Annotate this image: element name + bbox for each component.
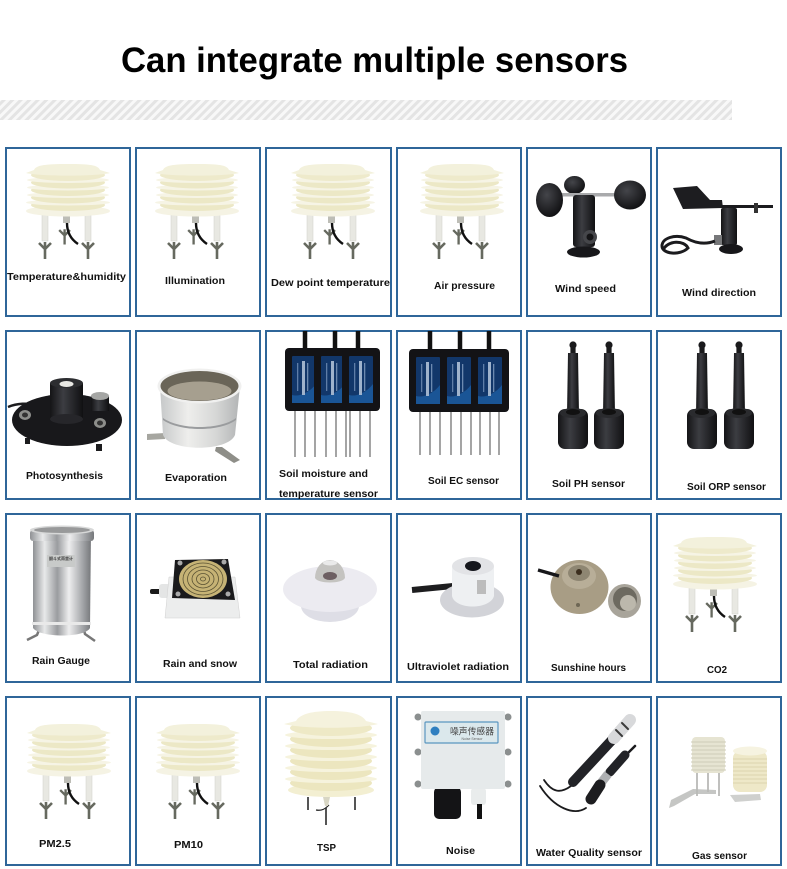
icon: noise sensor box: 噪声传感器 [450, 726, 494, 736]
label: Photosynthesis [26, 470, 103, 482]
label: Dew point temperature [271, 277, 390, 289]
panel: dew point temperature [266, 148, 391, 316]
icon: three soil probes [409, 331, 509, 455]
title: Can integrate multiple sensors [121, 41, 628, 80]
panel: PM2.5 [6, 697, 130, 865]
icon: radiation shield [673, 537, 757, 632]
label: Gas sensor [692, 850, 747, 862]
icon: evaporation bucket [147, 368, 242, 463]
panel: temperature and humidity [6, 148, 130, 316]
icon: radiation shield [27, 724, 111, 819]
icon: radiation shield [291, 164, 375, 259]
icon: photosynthesis sensor [8, 378, 122, 451]
panel: PM10 [136, 697, 260, 865]
panel: illumination [136, 148, 260, 316]
icon: rain and snow sensor [150, 559, 240, 618]
icon: gas sensor shields [669, 737, 767, 808]
label: Water Quality sensor [536, 847, 642, 859]
panel: rain gauge [6, 514, 130, 682]
panel: soil EC [397, 331, 521, 499]
label [279, 468, 378, 500]
label: Soil moisture and [279, 468, 368, 480]
icon: radiation shield [155, 164, 239, 259]
icon: sunshine sensor [538, 560, 641, 618]
panel: wind direction [657, 148, 781, 316]
icon: noise sensor box [414, 711, 512, 819]
icon: cup anemometer [536, 176, 646, 258]
icon: wind vane [662, 186, 773, 254]
panel: water quality [527, 697, 651, 865]
label: Rain and snow [163, 658, 238, 670]
panel: gas sensor [657, 697, 781, 865]
icon: rain gauge cylinder [27, 526, 95, 641]
label: Illumination [165, 275, 225, 287]
icon: UV sensor [412, 557, 504, 618]
icon: radiation shield [420, 164, 504, 259]
label: Noise [446, 845, 475, 857]
label: CO2 [707, 664, 727, 676]
icon: pyranometer dome [283, 560, 377, 622]
label: Rain Gauge [32, 655, 90, 667]
panel: noise [397, 697, 521, 865]
label: Air pressure [434, 280, 495, 292]
panel: ultraviolet radiation [397, 514, 521, 682]
panel: total radiation [266, 514, 391, 682]
panel: air pressure [397, 148, 521, 316]
panel: photosynthesis [6, 331, 130, 499]
label: PM10 [174, 839, 203, 851]
panel: rain and snow [136, 514, 260, 682]
icon: ORP probes [687, 341, 754, 449]
icon: PH probes [558, 341, 624, 449]
label: PM2.5 [39, 838, 71, 850]
panel: soil ORP [657, 331, 781, 499]
icon: radiation shield [156, 724, 240, 819]
label: Total radiation [293, 659, 368, 671]
icon: three soil probes [285, 331, 380, 457]
label: Soil PH sensor [552, 478, 625, 490]
hatched banner strip [0, 100, 732, 120]
label: Wind direction [682, 287, 756, 299]
panel: sunshine hours [527, 514, 651, 682]
icon: water quality probes [540, 720, 635, 811]
icon: large radiation shield [284, 711, 378, 825]
label: temperature sensor [279, 488, 378, 500]
label: Wind speed [555, 283, 616, 295]
icon: rain gauge cylinder: 翻斗式雨量计 [49, 555, 73, 561]
label: Temperature&humidity [7, 271, 126, 283]
panel: CO2 [657, 514, 781, 682]
panel: evaporation [136, 331, 260, 499]
label: Soil EC sensor [428, 475, 499, 487]
icon: radiation shield [26, 164, 110, 259]
label: Evaporation [165, 472, 227, 484]
panel: soil moisture and temperature [266, 331, 391, 500]
panel: wind speed [527, 148, 651, 316]
icon: noise sensor box: Noise Sensor [461, 737, 483, 741]
panel: TSP [266, 697, 391, 865]
label: TSP [317, 842, 336, 854]
label: Ultraviolet radiation [407, 661, 509, 673]
label: Soil ORP sensor [687, 481, 766, 493]
panel: soil PH [527, 331, 651, 499]
label: Sunshine hours [551, 662, 626, 674]
